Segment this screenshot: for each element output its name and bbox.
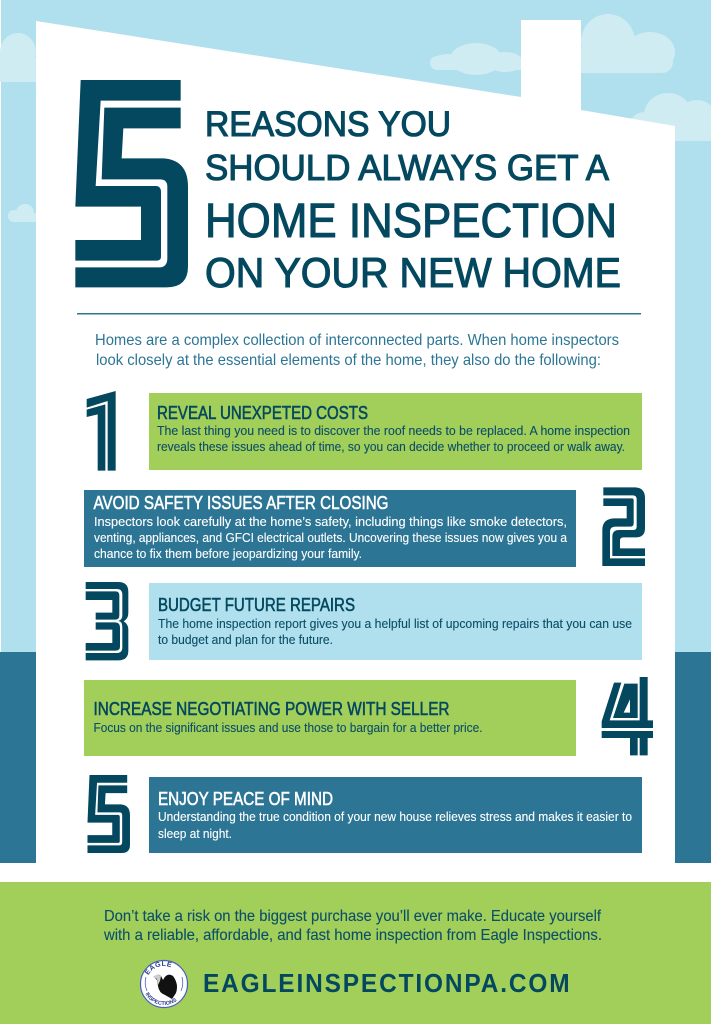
number four bbox=[602, 677, 653, 755]
body text: chance to fix them before jeopardizing your family. bbox=[94, 547, 362, 561]
call to action text: Don’t take a risk on the biggest purchase you’ll ever make. Educate yourself bbox=[104, 908, 602, 925]
heading: REVEAL UNEXPETED COSTS bbox=[157, 403, 368, 423]
intro text bbox=[95, 332, 619, 369]
number one bbox=[87, 391, 116, 471]
house silhouette bbox=[36, 20, 675, 882]
cloud: center bbox=[430, 43, 523, 75]
footer panel bbox=[0, 882, 711, 1024]
intro text: Homes are a complex collection of interconnected parts. When home inspectors bbox=[95, 332, 619, 349]
body text: reveals these issues ahead of time, so you can decide whether to proceed or walk away. bbox=[157, 440, 625, 454]
logo: eagle inspections bbox=[140, 960, 188, 1008]
sky background bbox=[1, 0, 711, 653]
body text: Understanding the true condition of your new house relieves stress and makes it easier to bbox=[158, 810, 632, 824]
body text bbox=[158, 617, 632, 647]
number five small bbox=[87, 775, 130, 853]
number two bbox=[602, 487, 645, 566]
website url: EAGLEINSPECTIONPA.COM bbox=[203, 969, 570, 998]
cloud: left upper bbox=[0, 33, 36, 82]
intro text: look closely at the essential elements of the home, they also do the following: bbox=[96, 352, 601, 369]
body text: Inspectors look carefully at the home’s safety, including things like smoke detectors, bbox=[94, 515, 567, 529]
left wall band bbox=[0, 652, 36, 863]
ground white strip bbox=[0, 863, 711, 882]
number three bbox=[86, 582, 128, 660]
cloud: left lower bbox=[8, 204, 36, 222]
divider line bbox=[77, 313, 641, 314]
cloud: right bbox=[630, 93, 711, 141]
body text bbox=[94, 515, 567, 561]
logo: eagle inspections: INSPECTIONS bbox=[146, 992, 176, 1005]
logo: eagle inspections: EAGLE bbox=[144, 961, 172, 975]
body text: sleep at night. bbox=[158, 827, 232, 841]
large number five bbox=[75, 80, 188, 287]
heading: BUDGET FUTURE REPAIRS bbox=[158, 595, 355, 615]
body text bbox=[158, 810, 632, 841]
title line: on your new home: ON YOUR NEW HOME bbox=[205, 249, 621, 296]
heading: ENJOY PEACE OF MIND bbox=[158, 789, 333, 809]
title line: home inspection: HOME INSPECTION bbox=[205, 195, 617, 248]
body text bbox=[157, 424, 630, 454]
title bbox=[205, 105, 621, 296]
body text: to budget and plan for the future. bbox=[158, 633, 333, 647]
panel: enjoy peace of mind bbox=[149, 777, 642, 853]
heading: AVOID SAFETY ISSUES AFTER CLOSING bbox=[94, 493, 388, 513]
panel: budget future repairs bbox=[149, 583, 642, 660]
body text: venting, appliances, and GFCI electrical outlets. Uncovering these issues now gives you a bbox=[94, 531, 567, 545]
body text: Focus on the significant issues and use those to bargain for a better price. bbox=[94, 721, 482, 735]
panel: avoid safety issues bbox=[84, 490, 576, 567]
title line: should always get a: SHOULD ALWAYS GET A bbox=[205, 147, 609, 188]
call to action text: with a reliable, affordable, and fast home inspection from Eagle Inspections. bbox=[103, 927, 602, 944]
panel: increase negotiating power bbox=[84, 680, 576, 756]
right wall band bbox=[675, 652, 711, 864]
call to action text bbox=[103, 908, 602, 944]
title line: reasons you: REASONS YOU bbox=[205, 105, 451, 144]
body text: The home inspection report gives you a helpful list of upcoming repairs that you can use bbox=[158, 617, 632, 631]
heading: INCREASE NEGOTIATING POWER WITH SELLER bbox=[94, 699, 450, 719]
cloud: behind chimney bbox=[578, 14, 675, 73]
panel: reveal unexpected costs bbox=[149, 393, 642, 470]
body text: The last thing you need is to discover the roof needs to be replaced. A home inspection bbox=[157, 424, 630, 438]
